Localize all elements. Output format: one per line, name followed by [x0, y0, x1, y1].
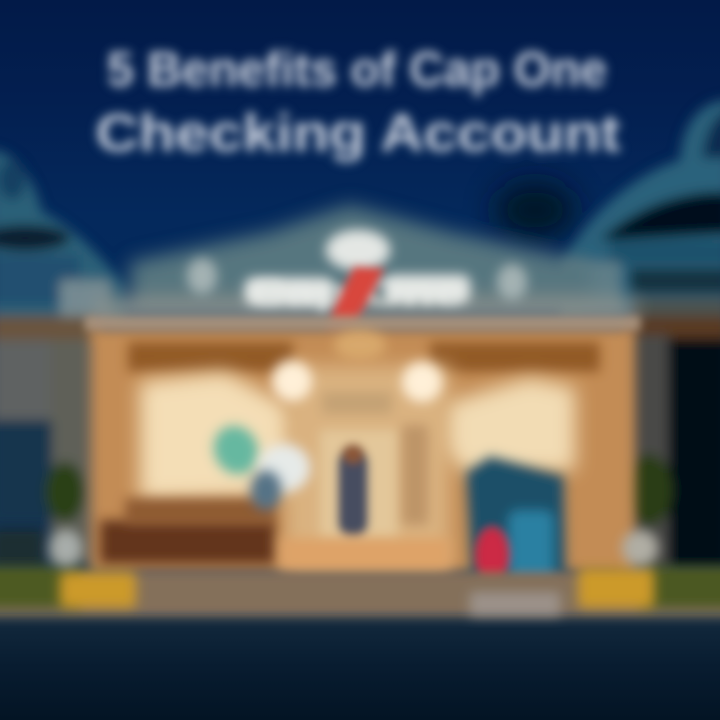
wooden frame: [90, 328, 635, 572]
lamp right: [402, 362, 442, 402]
title: [96, 43, 620, 163]
cornice: [85, 316, 640, 330]
grey mat: [470, 592, 560, 616]
right background building: [560, 100, 720, 570]
yellow planter left: [60, 572, 136, 608]
side lawn left: [0, 566, 80, 608]
title: Checking Account: [96, 104, 620, 163]
side lawn right: [640, 566, 720, 608]
teal figure left: [205, 418, 267, 482]
central sign panel: [322, 392, 392, 414]
column right of door: [402, 425, 428, 525]
white shrub left: [50, 530, 82, 566]
bench dark left: [100, 520, 275, 564]
blue figure: [508, 510, 554, 584]
left window: [140, 372, 295, 500]
sign text: Cap One: [248, 274, 464, 312]
central gable: [334, 330, 386, 360]
right window: [440, 378, 575, 475]
white shrub right: [622, 530, 658, 566]
sign glow: [187, 230, 527, 305]
dark lintel left: [128, 342, 293, 372]
lamp left: [272, 361, 312, 401]
figure in doorway: [338, 450, 368, 536]
title: 5 Benefits of Cap One: [107, 43, 607, 97]
red figure: [475, 527, 509, 583]
roof: [95, 205, 635, 320]
teal figure group: [466, 456, 566, 582]
dark sky patch: [495, 182, 575, 238]
roof sign: [187, 230, 527, 330]
orange step base: [280, 538, 450, 570]
door inner: [320, 430, 398, 540]
red swoosh logo: [326, 266, 384, 330]
dark lintel right: [430, 342, 600, 372]
white-blue figure: [258, 444, 310, 492]
central panel: [285, 365, 450, 570]
left background building: [0, 150, 125, 568]
building facade: [85, 316, 640, 584]
yellow planter right: [578, 568, 654, 608]
pavement: [0, 572, 720, 616]
dark ground base: [0, 614, 720, 720]
